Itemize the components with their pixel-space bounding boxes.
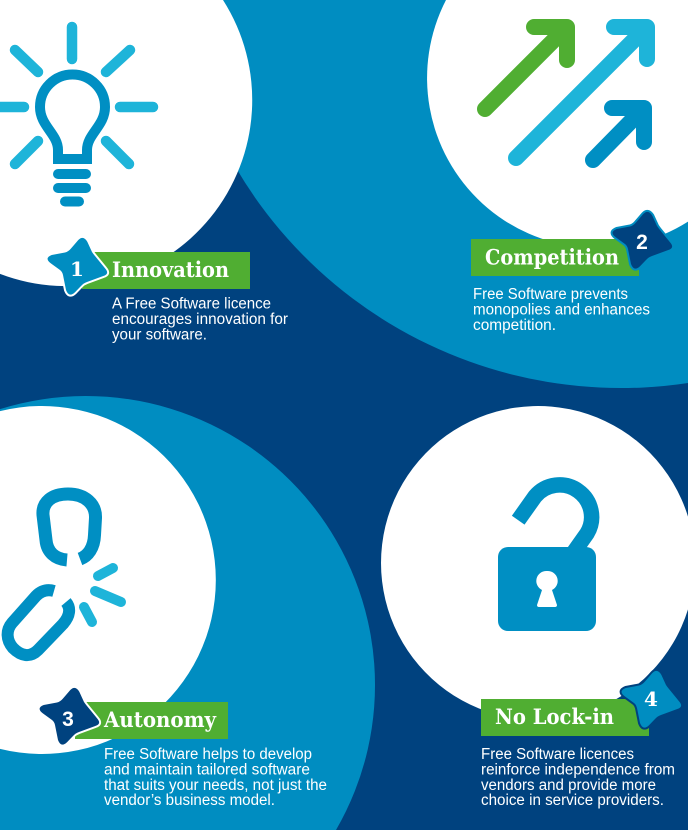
banner [75,702,228,739]
section 1: innovation [48,238,288,344]
body text: your software. [112,326,207,344]
body text [112,296,288,344]
heading: Competition [485,244,619,270]
number: 4 [644,687,658,711]
section 4: no lock-in [481,671,681,809]
bulb base [58,174,86,202]
body text: and maintain tailored software [104,762,310,778]
bottom left blue circle [0,396,375,830]
heading: No Lock-in [495,704,614,729]
body text: Free Software prevents [473,286,628,303]
body text [481,746,675,809]
body text: that suits your needs, not just the [104,777,327,794]
icon: broken chain [8,494,121,655]
number: 2 [636,231,648,254]
body text: A Free Software licence [112,296,271,312]
star badge [48,238,107,295]
shackle [518,485,592,554]
icon: growth arrows [485,27,647,160]
white circle: competition [427,0,688,248]
body text: Free Software licences [481,746,634,763]
body text: competition. [473,317,556,334]
body text: monopolies and enhances [473,302,650,318]
icon: open padlock [498,485,596,631]
keyhole [536,571,558,607]
banner [82,252,250,289]
dark blue arrow [593,108,644,160]
banner [481,699,649,736]
heading: Autonomy [103,707,217,732]
white circle: innovation [0,0,252,286]
body text: vendor’s business model. [104,792,275,809]
section 3: autonomy [40,688,327,809]
body text: Free Software helps to develop [104,746,312,763]
top right blue circle [178,0,688,388]
bulb outline [40,75,105,159]
lock body [498,547,596,631]
heading: Innovation [112,257,229,282]
section 2: competition [471,212,672,334]
body text [473,286,650,334]
lower link [8,590,69,655]
body text: vendors and provide more [481,777,656,794]
number: 3 [62,708,74,731]
bulb rays [0,27,153,164]
upper link [43,494,96,560]
number: 1 [70,257,84,281]
icon: light bulb [0,27,153,202]
star badge [613,212,672,269]
star badge [40,688,99,745]
star badge [622,671,681,728]
body text: encourages innovation for [112,311,288,328]
green arrow [485,27,567,109]
white circle: autonomy [0,406,216,754]
body text: choice in service providers. [481,792,664,809]
white circle: no lock-in [381,406,688,720]
body text: reinforce independence from [481,762,675,778]
sparks [84,568,121,622]
body text [104,746,327,809]
banner [471,239,639,276]
light blue arrow [516,27,647,158]
